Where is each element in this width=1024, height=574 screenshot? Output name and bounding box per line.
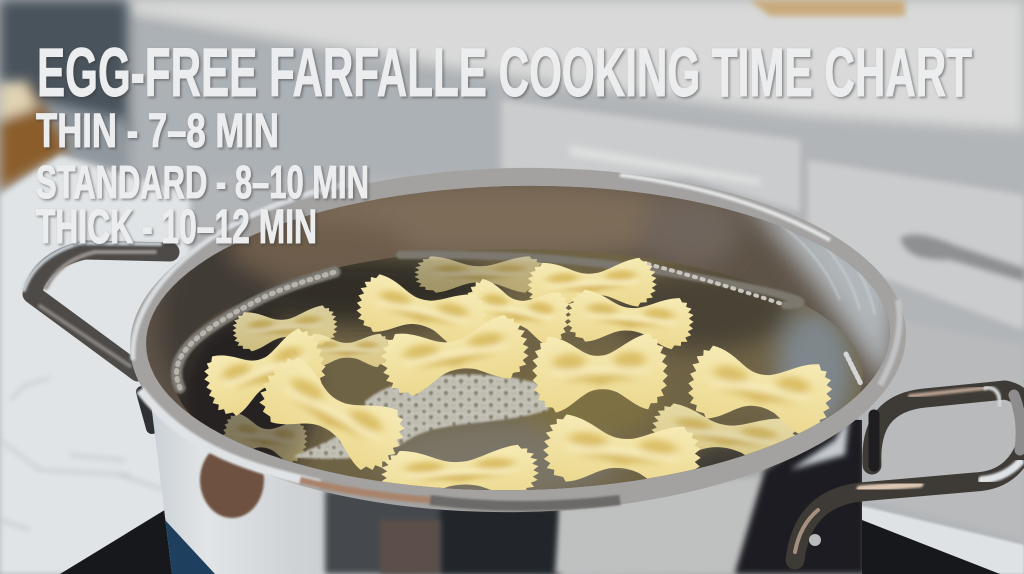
rim highlights — [133, 175, 900, 506]
wall streaks — [781, 227, 876, 315]
pot body — [150, 395, 862, 574]
water — [170, 249, 863, 490]
cooktop — [60, 508, 1000, 574]
pot inner wall — [146, 186, 890, 490]
icon: wooden board — [0, 80, 68, 190]
marble counter left — [0, 155, 190, 574]
farfalle pasta — [198, 257, 837, 504]
submerged farfalle — [220, 256, 802, 473]
icon: left pot handle — [24, 243, 170, 428]
title and cooking times — [36, 34, 972, 254]
pot rim — [127, 161, 909, 519]
icon: right pot handle — [795, 388, 1024, 560]
foam bubbles — [293, 374, 552, 459]
dark top-left cabinet — [0, 0, 128, 135]
thin time: THIN - 7–8 MIN — [36, 105, 279, 158]
upper countertop — [125, 0, 1024, 130]
pot body reflections — [166, 420, 862, 574]
foam at water edge — [177, 255, 861, 388]
standard time: STANDARD - 8–10 MIN — [36, 156, 369, 208]
thick time: THICK - 10–12 MIN — [36, 201, 317, 254]
handle bracket — [142, 392, 152, 428]
white counter right — [858, 505, 1024, 574]
